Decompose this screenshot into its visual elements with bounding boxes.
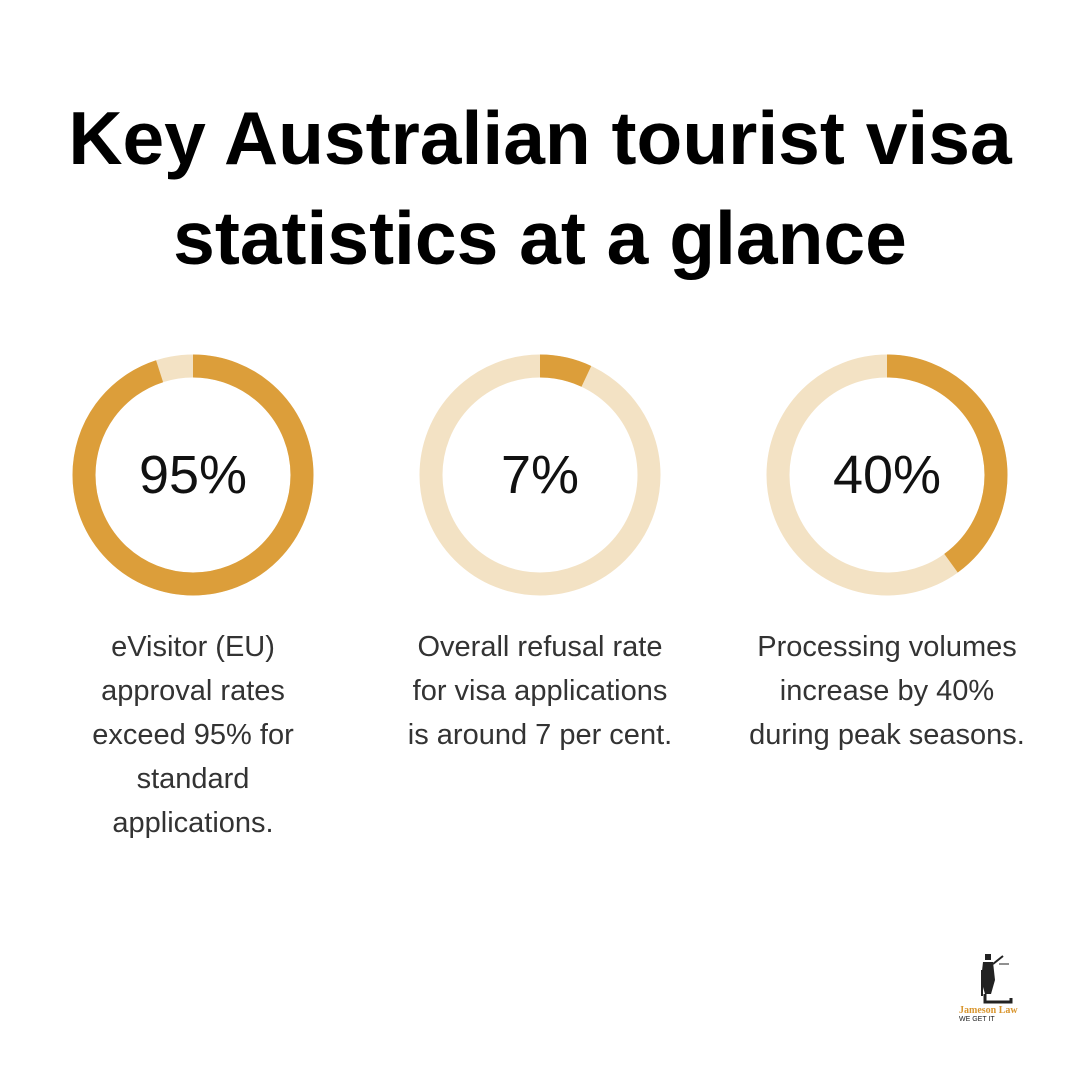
caption: 95%: standard <box>137 763 249 795</box>
title: Key Australian tourist visa <box>68 96 1012 180</box>
logo: Jameson Law <box>959 1005 1018 1016</box>
donut: 40%: 40% <box>833 445 941 505</box>
title <box>68 96 1012 280</box>
logo <box>959 954 1018 1023</box>
title: statistics at a glance <box>173 196 907 280</box>
caption: 95%: exceed 95% for <box>92 719 294 751</box>
caption: 40%: Processing volumes <box>757 631 1017 663</box>
caption: 7%: for visa applications <box>413 675 667 707</box>
caption: 40%: increase by 40% <box>780 675 994 707</box>
caption: 95%: applications. <box>112 807 274 839</box>
donut: 95% <box>72 354 314 596</box>
donut: 95%: 95% <box>139 445 247 505</box>
caption: 40%: during peak seasons. <box>749 719 1025 751</box>
icon: justice figure <box>981 954 1012 1004</box>
caption: 95% <box>92 631 294 839</box>
logo: WE GET IT <box>959 1016 995 1023</box>
donut: 40% <box>766 354 1008 596</box>
caption: 95%: approval rates <box>101 675 285 707</box>
caption: 7%: Overall refusal rate <box>418 631 662 663</box>
caption: 7%: is around 7 per cent. <box>408 719 672 751</box>
donut: 7%: 7% <box>501 445 579 505</box>
caption: 40% <box>749 631 1025 751</box>
donut: 7% <box>420 354 660 596</box>
caption: 95%: eVisitor (EU) <box>111 631 275 663</box>
caption: 7% <box>408 631 672 751</box>
